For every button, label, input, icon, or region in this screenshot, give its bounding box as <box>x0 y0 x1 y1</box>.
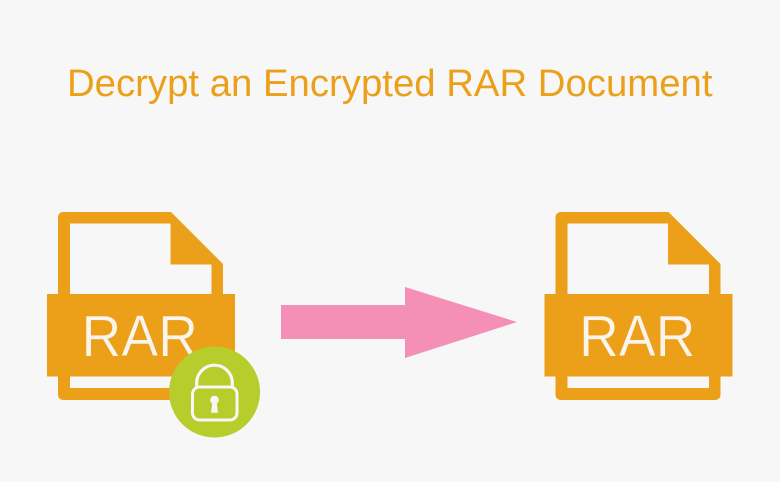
bottom window <box>70 376 212 388</box>
lock shackle <box>197 365 232 387</box>
icon: green lock badge <box>169 346 260 438</box>
file outline <box>556 212 720 400</box>
arrow <box>281 287 517 358</box>
RAR band <box>544 294 732 376</box>
icon: decrypted RAR file <box>544 212 732 400</box>
title: Decrypt an Encrypted RAR Document <box>67 63 713 105</box>
RAR label: RAR <box>82 304 198 369</box>
icon: encrypted RAR file <box>47 212 260 438</box>
lock body <box>192 387 237 420</box>
file outline <box>58 212 223 400</box>
bottom window <box>568 376 709 388</box>
badge circle <box>169 346 260 438</box>
RAR band <box>47 294 235 376</box>
keyhole <box>210 396 219 413</box>
RAR label: RAR <box>579 304 696 369</box>
